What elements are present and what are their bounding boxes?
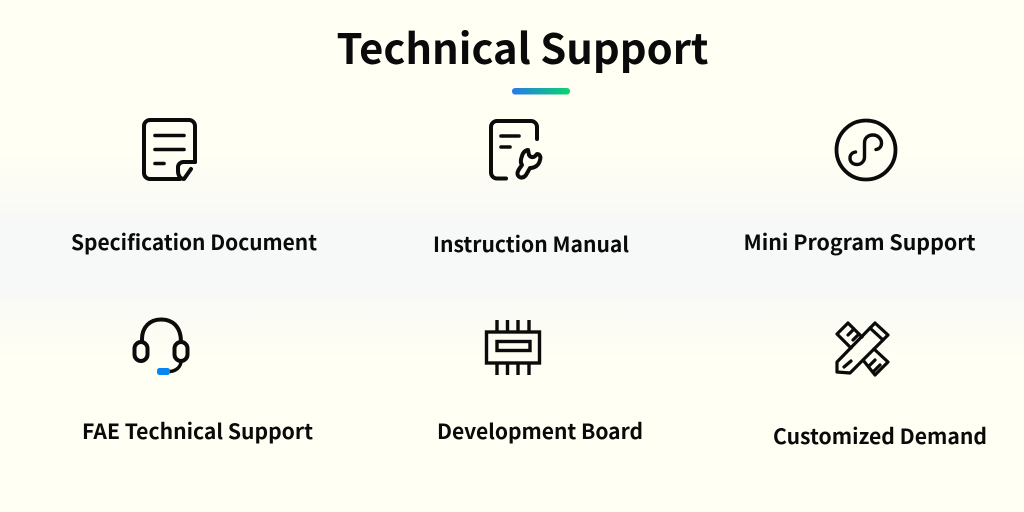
item: Mini Program Support <box>744 120 976 257</box>
label: Customized Demand <box>773 421 987 451</box>
icon: ruler and pencil <box>837 323 888 375</box>
label: FAE Technical Support <box>82 416 313 446</box>
label: Development Board <box>437 416 643 446</box>
label: Specification Document <box>71 227 317 257</box>
label: Mini Program Support <box>744 227 976 257</box>
item: Instruction Manual <box>433 121 629 259</box>
item: Customized Demand <box>773 323 987 451</box>
icon: manual with wrench <box>491 121 540 178</box>
item: Development Board <box>437 320 643 446</box>
icon: mini program circle <box>836 120 896 180</box>
icon: headset <box>134 320 188 375</box>
label: Instruction Manual <box>433 229 629 259</box>
icon: document with folded corner <box>144 120 195 179</box>
icon: circuit chip <box>486 320 540 375</box>
title accent bar <box>512 88 570 94</box>
item: FAE Technical Support <box>82 320 313 446</box>
title: Technical Support <box>336 16 708 77</box>
item: Specification Document <box>71 120 317 257</box>
